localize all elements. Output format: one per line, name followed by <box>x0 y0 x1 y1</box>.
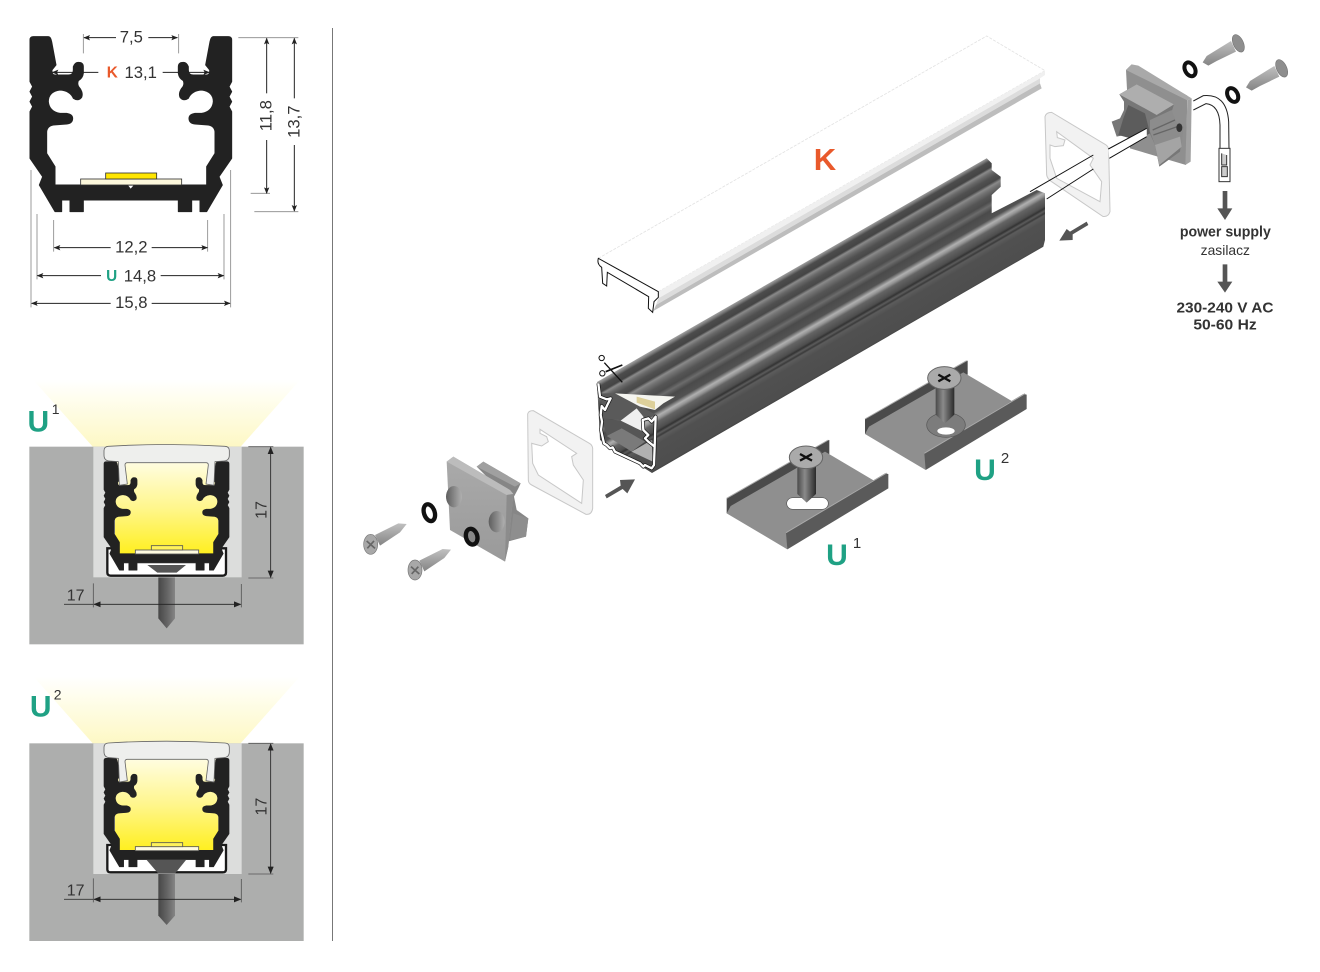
light cone <box>33 676 300 744</box>
LED strip on profile floor <box>81 173 182 189</box>
screw <box>147 565 186 628</box>
screw <box>408 549 451 580</box>
dimension depth 17 <box>248 447 273 578</box>
recess <box>93 743 242 874</box>
cover side shadow <box>653 83 1042 311</box>
label U1 bracket: U <box>826 539 848 572</box>
plate side rim <box>1185 98 1192 165</box>
profile <box>104 462 229 570</box>
dimension values: 11,8 <box>257 100 276 131</box>
mounting bracket <box>107 845 226 872</box>
screw <box>364 523 407 554</box>
dimension depth 17: 17 <box>253 798 270 816</box>
main aluminium profile body <box>597 158 1045 473</box>
plug leg highlight <box>1155 137 1182 165</box>
left end assembly: gasket, end cap, screws, arrow <box>364 411 635 580</box>
yellow light chamber <box>115 462 218 554</box>
dimension arrows <box>32 38 294 303</box>
panel: mounting section U1 <box>28 380 304 644</box>
power labels: 230-240 V AC <box>1176 300 1274 317</box>
cut end outline, white face <box>598 383 656 468</box>
label U2 bracket <box>974 450 1009 487</box>
label U1 <box>28 401 60 438</box>
plug leg grooves <box>1153 120 1177 135</box>
label U2 <box>30 687 62 723</box>
arrow down to mains <box>1217 264 1232 293</box>
recess <box>93 447 242 577</box>
label U1 bracket: 1 <box>853 535 861 552</box>
diffuser cover <box>104 741 229 782</box>
dimension values: 13,7 <box>285 105 304 138</box>
gasket <box>1045 112 1110 216</box>
dimension values: 12,2 <box>115 237 148 256</box>
profile cross-section <box>30 37 232 212</box>
dimension values: U <box>106 268 117 285</box>
right end assembly: gasket, cable, screws, power labels <box>1030 33 1290 333</box>
label K: K <box>814 142 837 177</box>
wall <box>29 447 304 644</box>
LED strip <box>135 546 199 554</box>
plug bridge top <box>1119 84 1174 115</box>
bracket U1 <box>727 440 888 549</box>
dimension values: K <box>107 65 118 82</box>
O-ring <box>1182 61 1198 78</box>
profile <box>104 758 229 867</box>
chamber side <box>632 440 653 462</box>
diffuser cover K, exploded <box>598 36 1045 312</box>
cap plate <box>1126 64 1187 165</box>
dimension depth 17: 17 <box>253 501 270 519</box>
chamber back wall <box>602 418 645 443</box>
mounting brackets <box>727 361 1027 549</box>
mounting bracket <box>107 548 226 576</box>
label U1: U <box>28 405 49 438</box>
dimension extension lines <box>31 34 298 307</box>
right end cap with plug <box>1112 64 1192 167</box>
wall <box>29 743 304 941</box>
vertical divider <box>332 28 334 941</box>
panel: mounting section U2 <box>29 676 304 941</box>
LED chip <box>637 397 655 409</box>
cover top face <box>598 36 1045 292</box>
chamber floor <box>607 428 645 452</box>
LED strip tape <box>615 393 675 410</box>
power labels <box>1176 225 1274 333</box>
dimension values: 13,1 <box>124 63 157 82</box>
power labels: power supply <box>1180 225 1272 241</box>
gasket <box>528 411 593 514</box>
yellow light chamber <box>115 758 218 851</box>
arrow into profile <box>605 479 635 498</box>
wire <box>1193 95 1229 149</box>
plug right leg <box>1150 110 1183 165</box>
dimension values <box>106 27 304 312</box>
dimension width 17: 17 <box>67 588 85 605</box>
icon: scissors <box>599 355 622 382</box>
dimension depth 17 <box>248 743 273 874</box>
tape backing <box>621 408 643 432</box>
screw <box>1203 33 1247 66</box>
light cone <box>33 380 300 447</box>
cover end outline <box>598 258 658 312</box>
O-ring <box>1225 86 1241 104</box>
O-ring <box>422 503 437 523</box>
plug silhouette <box>1112 84 1183 167</box>
dimension width 17 <box>64 878 241 902</box>
plug screw hole <box>1176 123 1182 132</box>
power labels: 50-60 Hz <box>1193 316 1257 333</box>
label U2 bracket: 2 <box>1001 450 1009 467</box>
LED strip <box>135 843 199 851</box>
label U2: U <box>30 690 51 723</box>
label U2 bracket: U <box>974 454 996 487</box>
interior upper wall <box>602 393 657 420</box>
plate top rim <box>1126 64 1192 100</box>
diffuser cover <box>104 444 229 485</box>
dimension values: 14,8 <box>124 266 156 285</box>
end cap <box>446 457 528 562</box>
screw <box>147 860 186 925</box>
dimension values: 15,8 <box>115 293 148 312</box>
profile open end with LED strip and scissors <box>598 355 675 468</box>
dimension width 17: 17 <box>67 883 85 900</box>
panel: profile cross-section with dimensions <box>30 27 304 312</box>
label U1: 1 <box>52 401 60 417</box>
connector <box>1219 148 1230 182</box>
dimension values: 7,5 <box>120 27 143 46</box>
dimension width 17 <box>64 583 241 607</box>
screw <box>1246 58 1290 91</box>
cover side <box>656 78 1040 305</box>
label U1 bracket <box>826 535 861 572</box>
cut end outline, dark edge <box>598 383 656 468</box>
cable to end cap <box>1030 128 1147 199</box>
power labels: zasilacz <box>1201 242 1250 258</box>
arrow down to power supply <box>1217 191 1232 220</box>
label U2: 2 <box>54 687 62 703</box>
arrow into profile <box>1059 222 1088 241</box>
cover lip <box>658 71 1045 298</box>
plug channel <box>1118 105 1150 140</box>
bracket U2 <box>865 361 1027 470</box>
